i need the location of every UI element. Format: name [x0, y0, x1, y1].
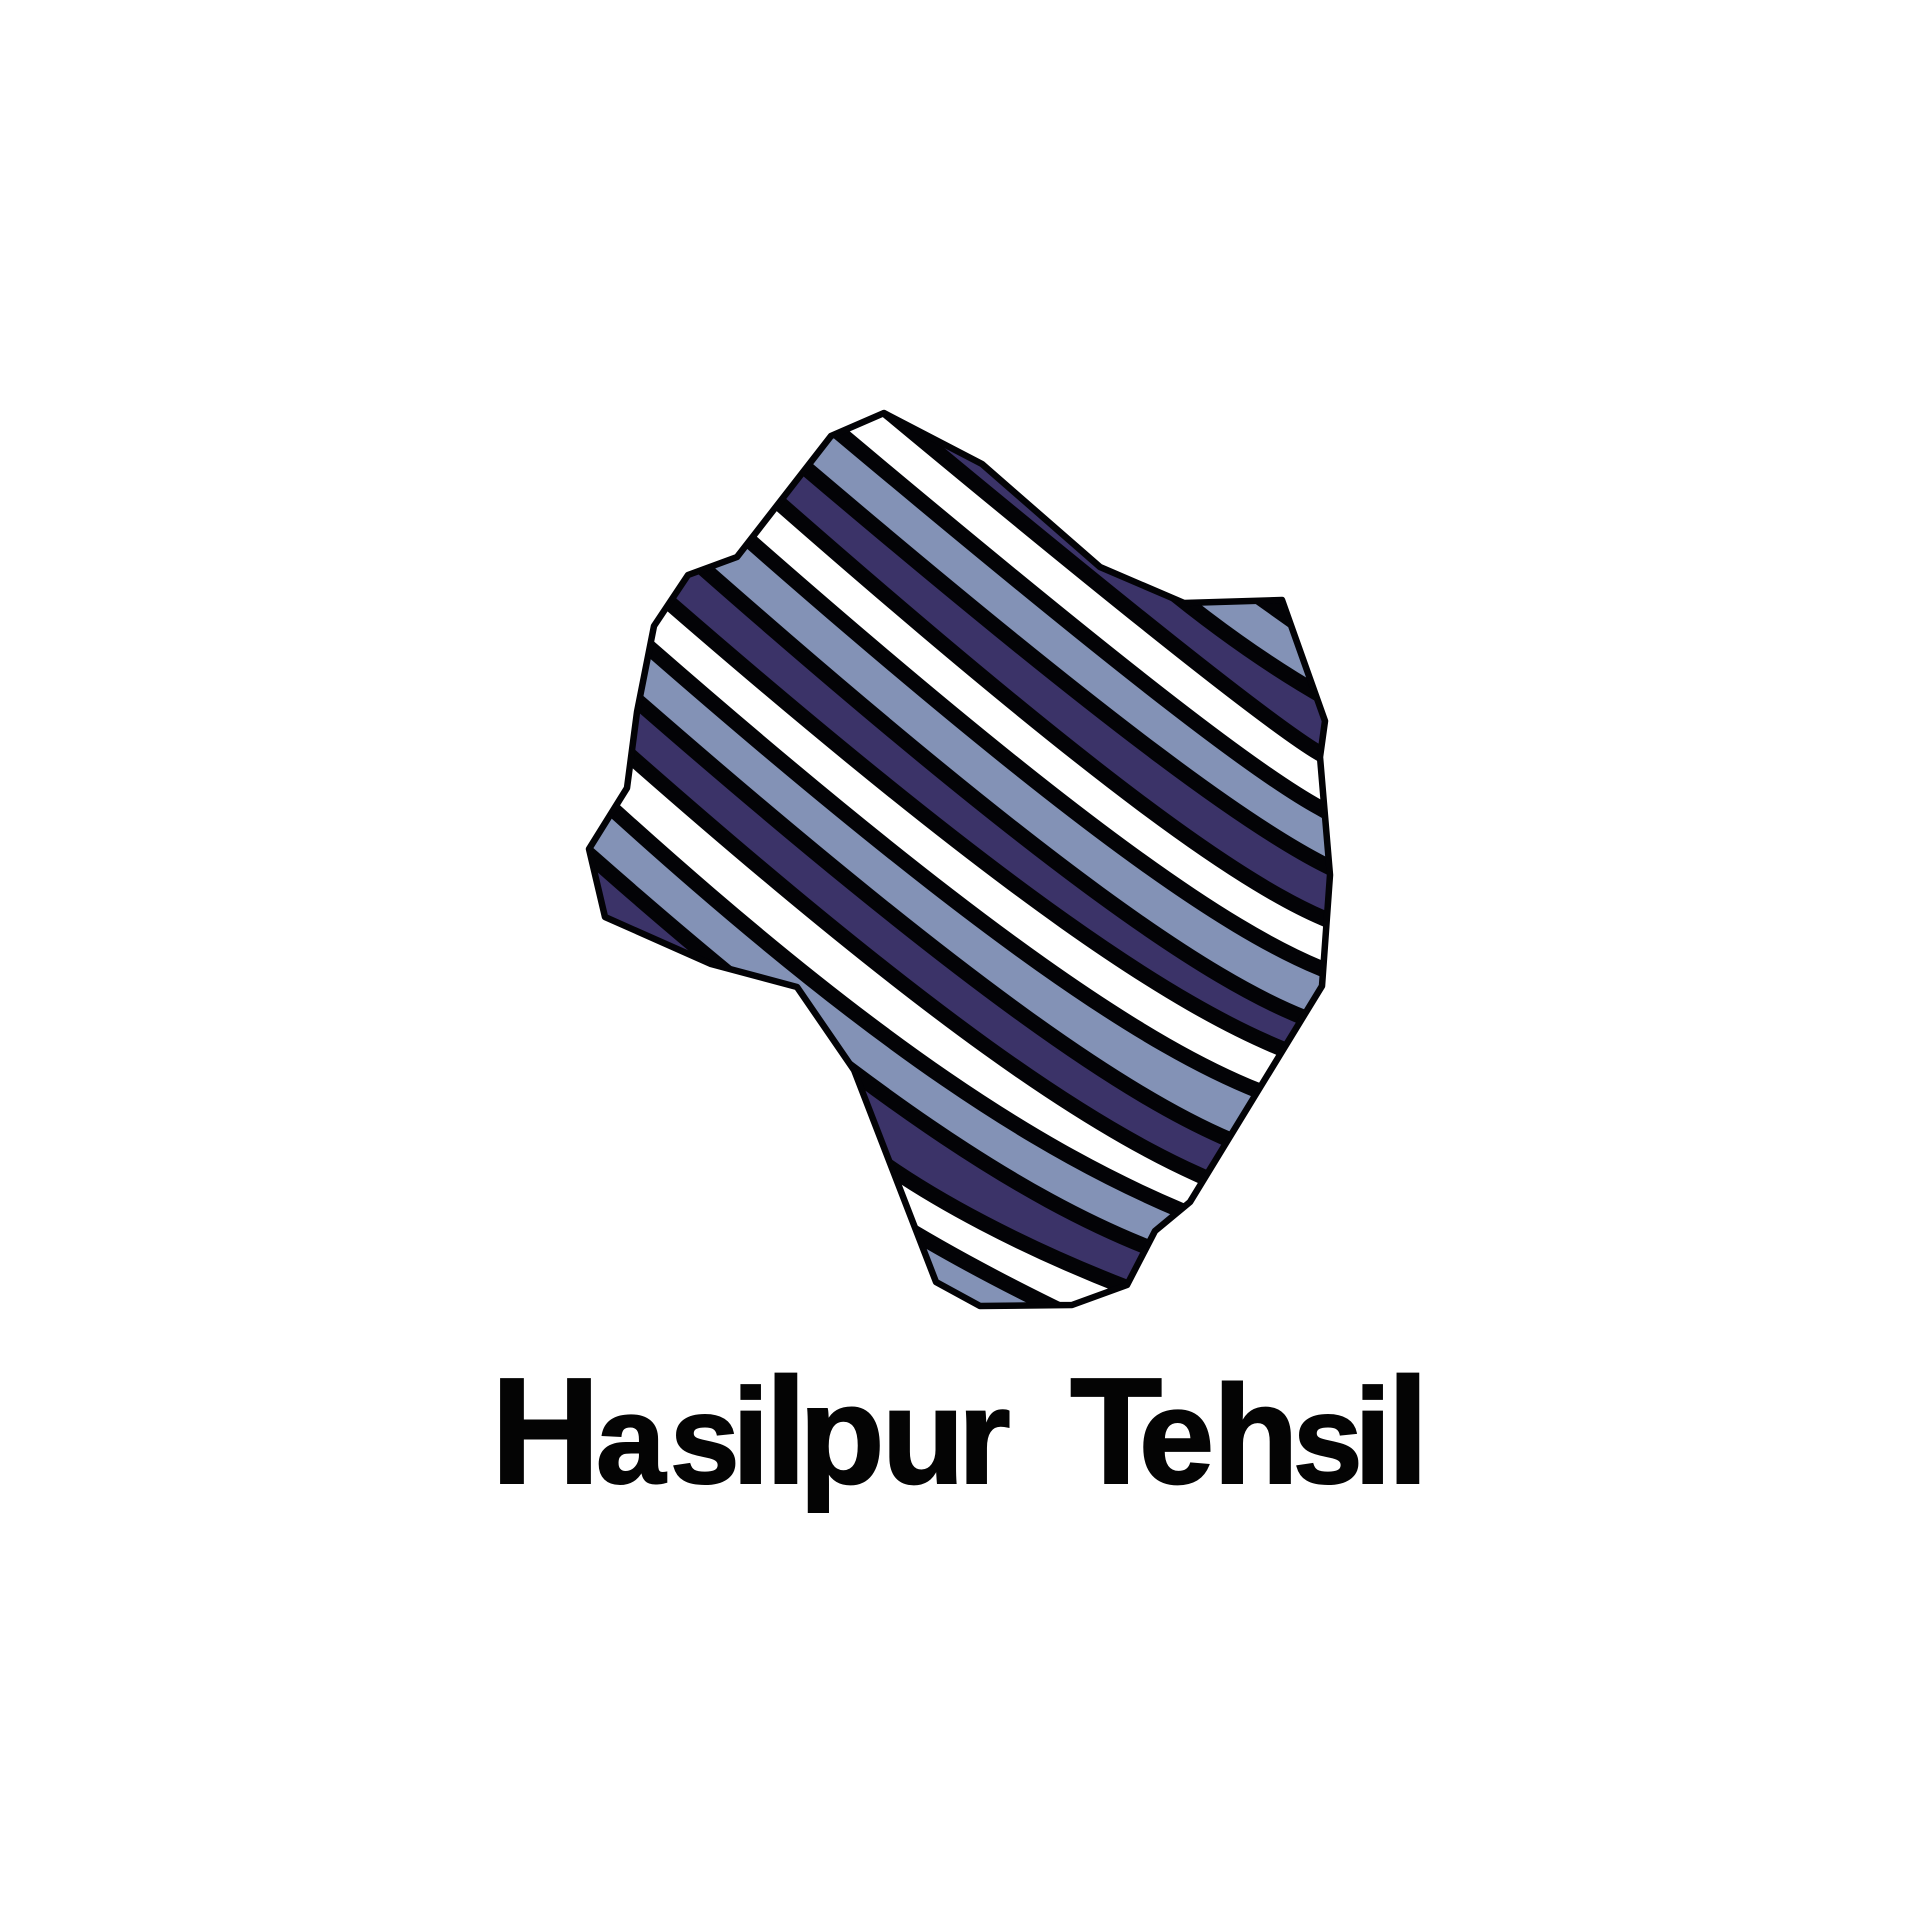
- title: i: [732, 1361, 770, 1512]
- title: T: [1070, 1346, 1162, 1515]
- title: i: [1354, 1361, 1392, 1512]
- title: p: [799, 1356, 885, 1513]
- title: h: [1213, 1356, 1299, 1513]
- title: s: [1293, 1371, 1363, 1510]
- title: as: [596, 1371, 740, 1510]
- title: H: [491, 1346, 600, 1515]
- map outline: [589, 413, 1330, 1306]
- title: e: [1139, 1361, 1214, 1512]
- title: l: [765, 1346, 807, 1515]
- striped bands clipped to the map outline: [592, 416, 1327, 1303]
- title: l: [1387, 1346, 1429, 1515]
- map: Hasilpur Tehsil striped region: [586, 410, 1334, 1310]
- title: ur: [882, 1361, 1011, 1512]
